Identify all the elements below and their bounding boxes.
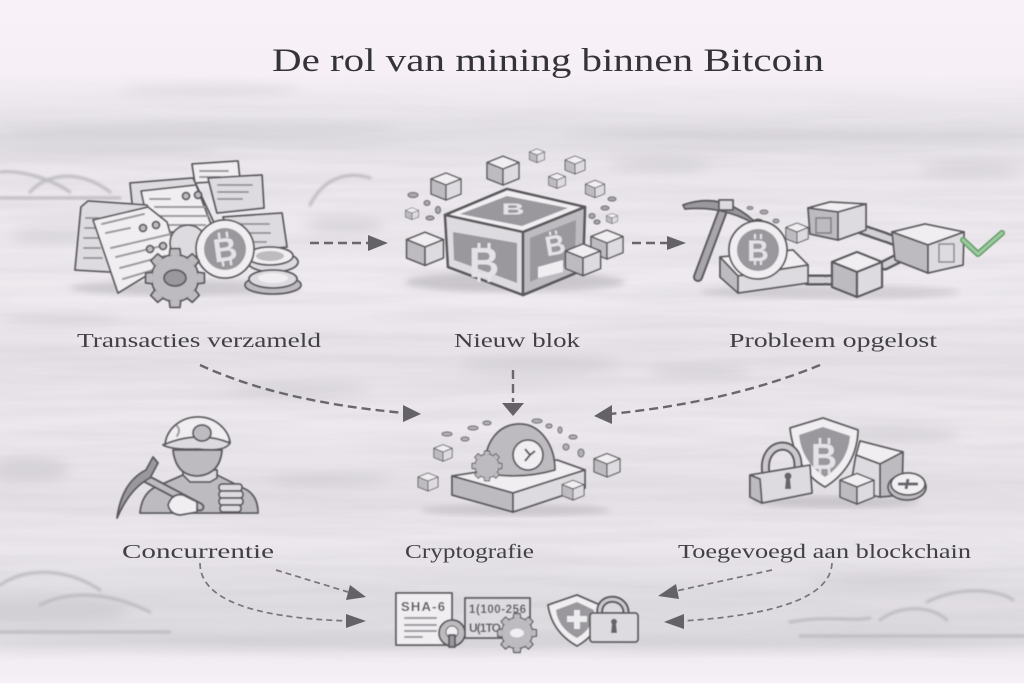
icon: shield, padlock and blocks bbox=[750, 418, 926, 508]
icon: new block with bitcoin: B bbox=[543, 228, 568, 262]
icon: SHA document and hash tools: U(1TO bbox=[469, 621, 501, 635]
icon: SHA document and hash tools bbox=[396, 593, 638, 652]
icon: transactions and coins bbox=[70, 161, 301, 307]
label: Toegevoegd aan blockchain: Toegevoegd aan blockchain bbox=[678, 541, 971, 563]
icon: SHA document and hash tools: SHA-6 bbox=[401, 599, 445, 614]
icon: new block with bitcoin: B bbox=[501, 200, 525, 218]
icon: helmet on cryptographic base bbox=[418, 419, 620, 516]
arrow: block to solved problem bbox=[632, 236, 686, 250]
label: Concurrentie: Concurrentie bbox=[122, 541, 274, 563]
icon: pickaxe, coin and chain of blocks: B bbox=[747, 235, 769, 268]
arrow: transactions to block bbox=[310, 235, 388, 251]
label: Nieuw blok: Nieuw blok bbox=[454, 330, 580, 352]
icon: transactions and coins: B bbox=[211, 230, 239, 269]
icon: pickaxe, coin and chain of blocks bbox=[683, 200, 1002, 299]
arrows: top row to mining center bbox=[200, 365, 820, 424]
label: Cryptografie: Cryptografie bbox=[405, 541, 534, 563]
arrows: bottom row to crypto tools bbox=[200, 563, 832, 629]
label: Transacties verzameld: Transacties verzameld bbox=[77, 330, 321, 352]
label: Probleem opgelost: Probleem opgelost bbox=[729, 330, 938, 352]
icon: shield, padlock and blocks: B bbox=[811, 436, 837, 477]
icon: new block with bitcoin: B bbox=[469, 239, 499, 286]
icon: new block with bitcoin bbox=[405, 149, 625, 295]
icon: miner with pickaxe bbox=[117, 417, 258, 518]
icon: SHA document and hash tools: 1(100-256 bbox=[469, 604, 526, 616]
title: De rol van mining binnen Bitcoin bbox=[272, 43, 824, 79]
